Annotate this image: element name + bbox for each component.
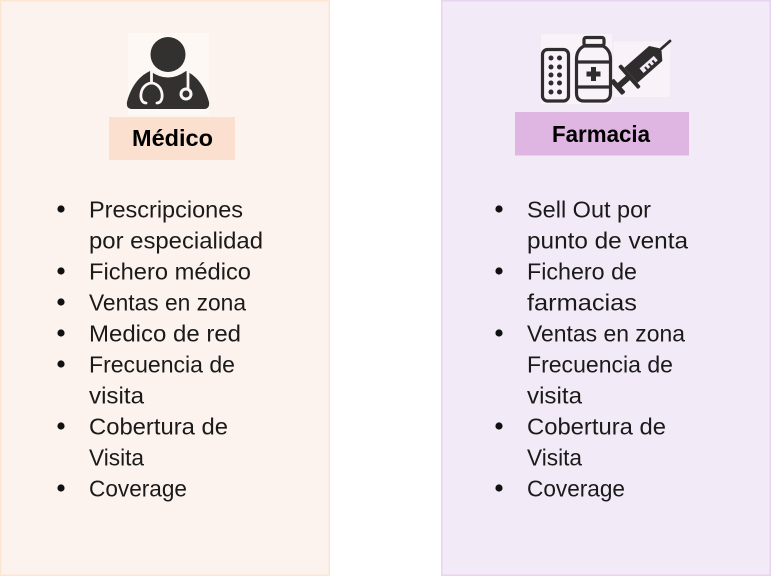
list: Farmacia: farmacias: [527, 290, 637, 316]
panel: Farmacia: [442, 1, 770, 575]
list: Médico: por especialidad: [89, 228, 263, 254]
list: Médico: [57, 196, 263, 502]
label: Farmacia: [515, 112, 689, 156]
list: Farmacia: Fichero de: [527, 258, 637, 284]
list: Farmacia: Coverage: [527, 476, 625, 502]
panel: Médico: [1, 1, 329, 575]
list: Farmacia: visita: [527, 382, 583, 408]
list: Farmacia: Cobertura de: [527, 414, 666, 440]
icon: syringe: [606, 30, 680, 100]
list: Farmacia: Sell Out por: [527, 196, 651, 222]
icon: doctor: [127, 33, 209, 115]
list: Médico: Frecuencia de: [89, 352, 235, 378]
icon: blister pack: [541, 34, 612, 104]
list: Médico: Fichero médico: [89, 258, 251, 284]
list: Médico: Cobertura de: [89, 414, 228, 440]
list: Médico: visita: [89, 382, 145, 408]
list: Farmacia: Ventas en zona: [527, 320, 686, 346]
icon: medicine bottle: [576, 38, 611, 101]
list: Médico: Prescripciones: [89, 196, 243, 222]
list: Farmacia: Visita: [527, 444, 583, 470]
list: Médico: Coverage: [89, 476, 187, 502]
list: Médico: Medico de red: [89, 320, 241, 346]
list: Médico: Visita: [89, 444, 145, 470]
label: Farmacia: Farmacia: [552, 121, 651, 147]
list: Farmacia: Frecuencia de: [527, 352, 673, 378]
list: Farmacia: [495, 196, 689, 502]
list: Médico: Ventas en zona: [89, 290, 247, 316]
label: Médico: Médico: [132, 125, 213, 151]
label: Médico: [109, 117, 235, 160]
list: Farmacia: punto de venta: [527, 228, 689, 254]
